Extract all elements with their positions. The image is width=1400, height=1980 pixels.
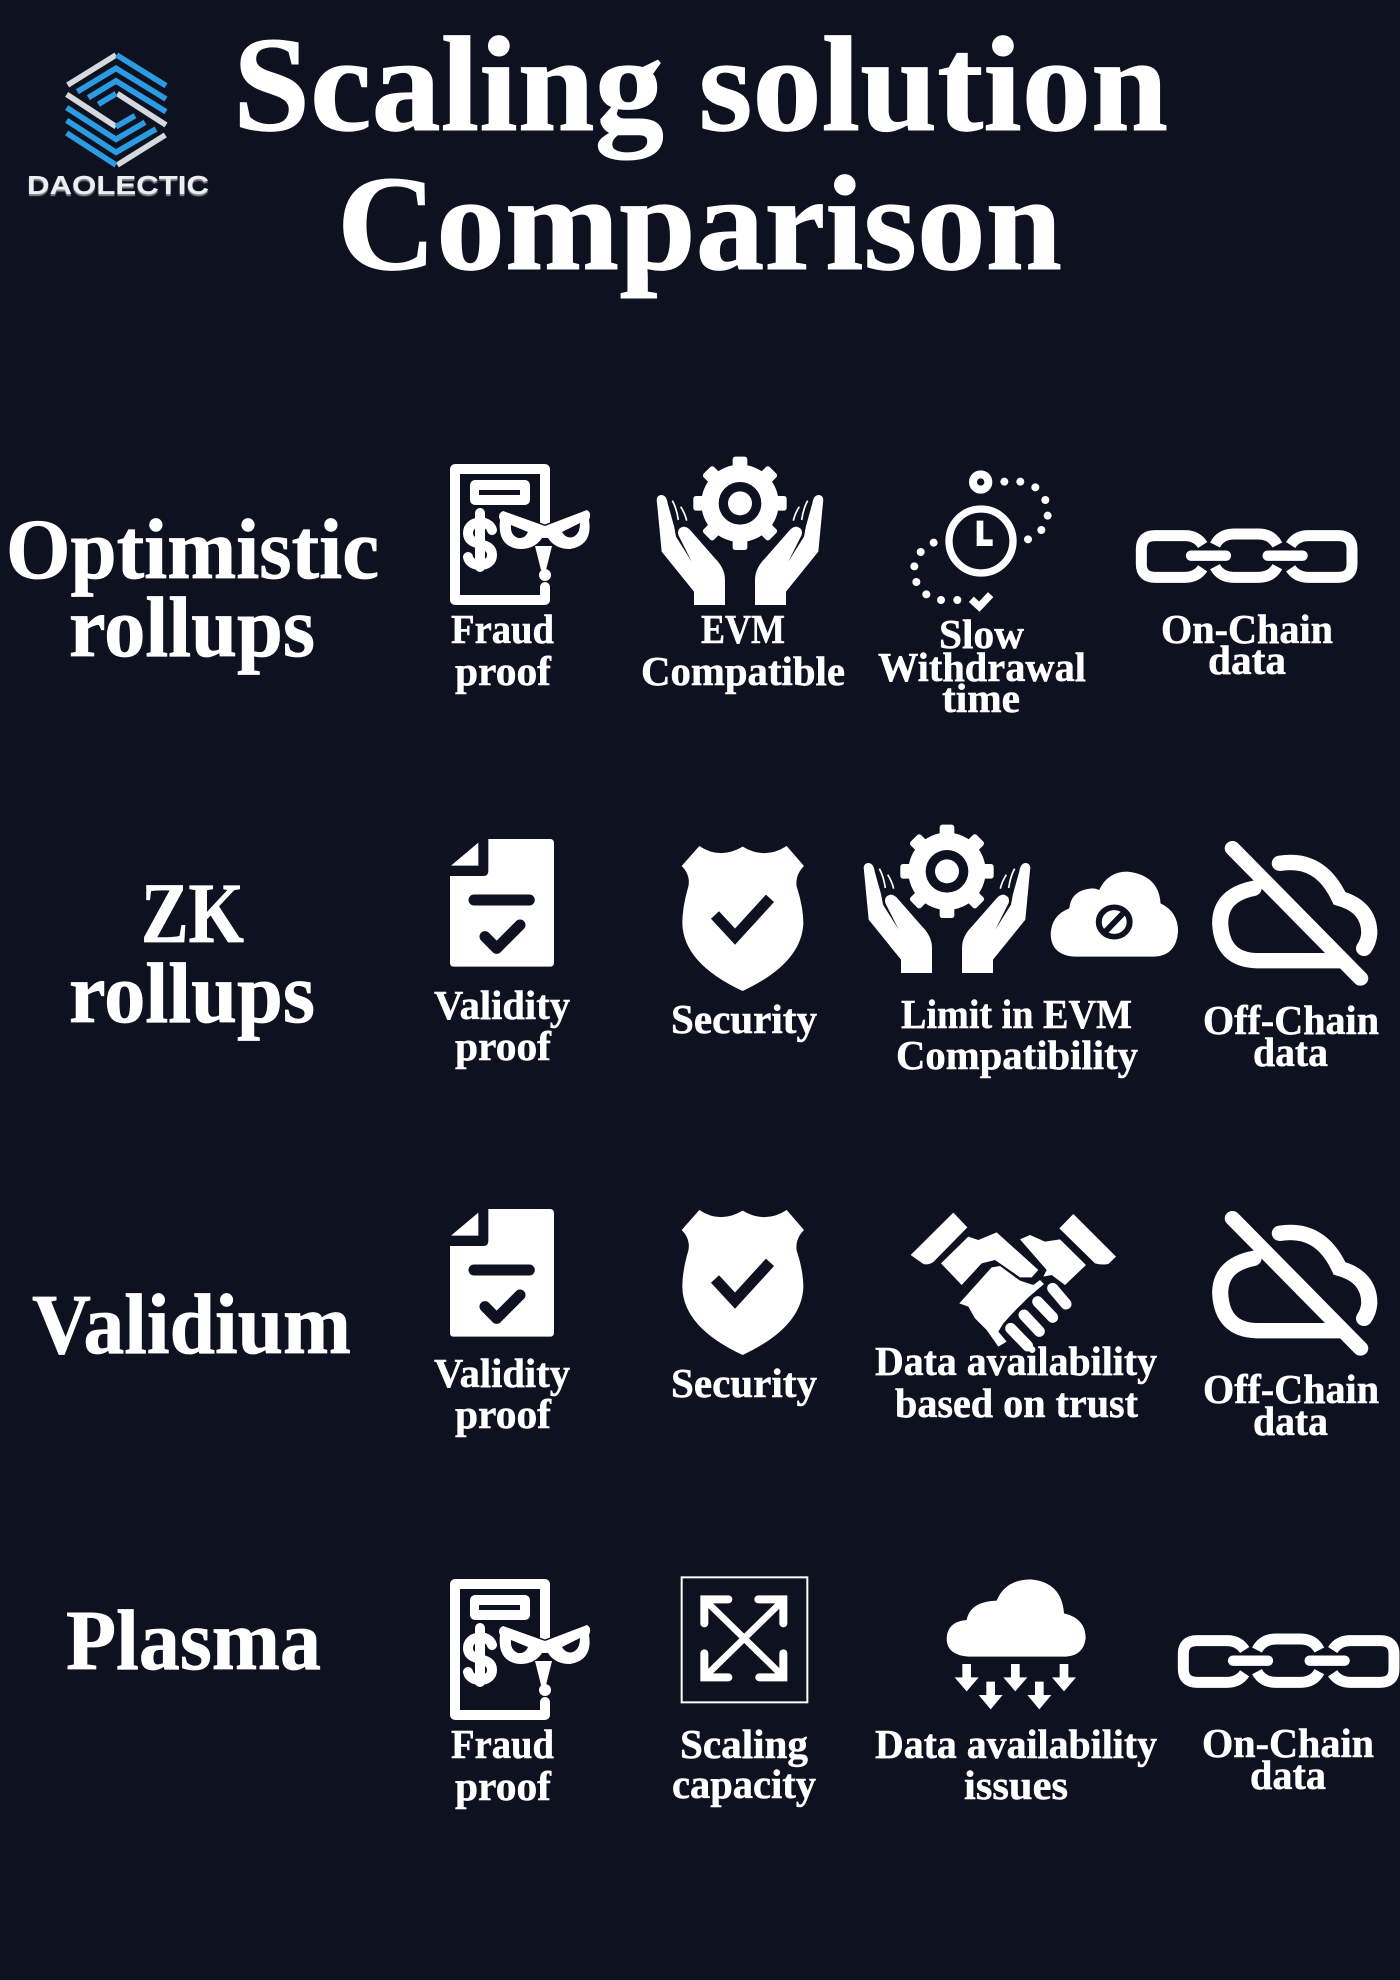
label: Validity proof: proof (455, 1023, 552, 1069)
label: Fraud proof: Fraud (451, 1721, 554, 1767)
label: Data availability based on trust: based on trust (895, 1380, 1138, 1426)
label: Scaling capacity: capacity (672, 1761, 816, 1807)
label: Security: Security (671, 996, 817, 1042)
label: Fraud proof (451, 1721, 554, 1809)
row heading: ZK rollups (69, 865, 315, 1041)
label: EVM Compatible: Compatible (641, 648, 845, 694)
icon: security shield (682, 1210, 804, 1355)
label: On-Chain data (1202, 1720, 1374, 1798)
row heading: Optimistic rollups: rollups (69, 579, 315, 675)
label: Data availability issues (875, 1721, 1157, 1808)
title: Scaling solution (233, 10, 1168, 160)
icon: cloud with download arrows (947, 1579, 1086, 1709)
label: Validity proof (434, 1350, 570, 1437)
label: Data availability issues: issues (964, 1762, 1068, 1808)
label: On-Chain data: data (1250, 1752, 1326, 1798)
label: Fraud proof: Fraud (451, 606, 554, 652)
icon: hands with gear and blocked cloud (864, 825, 1178, 973)
label: On-Chain data: On-Chain (1202, 1720, 1374, 1766)
label: Off-Chain data: Off-Chain (1203, 1366, 1379, 1412)
icon: crossed-out cloud (1220, 1218, 1369, 1348)
icon: hands holding gear (657, 457, 823, 605)
label: EVM Compatible: EVM (701, 606, 785, 652)
icon: fraud proof document with mask (455, 1584, 590, 1715)
label: Data availability based on trust: Data availability (875, 1338, 1157, 1384)
icon: crossed-out cloud (1220, 848, 1369, 978)
row heading: Optimistic rollups (6, 501, 379, 675)
icon: security shield (682, 846, 804, 991)
icon: clock with dotted path (910, 474, 1052, 607)
label: Fraud proof: proof (455, 1763, 552, 1809)
label: Off-Chain data: data (1253, 1029, 1328, 1075)
label: Fraud proof (451, 606, 554, 694)
label: Slow Withdrawal time: time (942, 675, 1020, 721)
row heading: Optimistic rollups: Optimistic (6, 501, 379, 597)
label: Limit in EVM Compatibility: Compatibility (896, 1032, 1138, 1078)
label: EVM Compatible (641, 606, 845, 694)
label: Limit in EVM Compatibility (896, 991, 1138, 1078)
label: Slow Withdrawal time: Slow (939, 611, 1024, 657)
title: Comparison (337, 149, 1062, 299)
label: Scaling capacity (672, 1721, 816, 1807)
label: Validity proof (434, 982, 570, 1069)
label: Validity proof: Validity (434, 1350, 570, 1396)
label: Validity proof: proof (455, 1391, 552, 1437)
label: Off-Chain data: data (1253, 1398, 1328, 1444)
icon: chain links (1183, 1639, 1394, 1682)
label: Data availability issues: Data availability (875, 1721, 1157, 1767)
icon: scaling arrows in a box (682, 1577, 807, 1702)
label: Fraud proof: proof (455, 648, 552, 694)
icon: chain links (1141, 534, 1352, 577)
label: On-Chain data (1161, 606, 1333, 683)
row: ZK rollups (69, 825, 1379, 1078)
label: Security: Security (671, 1360, 817, 1406)
logo: Daolectic: DAOLECTIC (27, 170, 209, 200)
row heading: Plasma: Plasma (66, 1592, 321, 1688)
label: Off-Chain data (1203, 997, 1379, 1075)
label: On-Chain data: data (1208, 637, 1286, 683)
icon: validity document with check (450, 1209, 554, 1337)
row: Optimistic rollups (6, 457, 1352, 721)
label: Off-Chain data (1203, 1366, 1379, 1444)
label: Limit in EVM Compatibility: Limit in EVM (901, 991, 1132, 1037)
row heading: ZK rollups: ZK (141, 865, 244, 961)
icon: handshake (911, 1213, 1116, 1347)
logo: Daolectic (27, 55, 209, 200)
row heading: ZK rollups: rollups (69, 945, 315, 1041)
row: Validium (32, 1209, 1379, 1444)
row heading: Validium: Validium (32, 1276, 351, 1372)
label: Off-Chain data: Off-Chain (1203, 997, 1379, 1043)
label: On-Chain data: On-Chain (1161, 606, 1333, 652)
label: Validity proof: Validity (434, 982, 570, 1028)
label: Slow Withdrawal time: Withdrawal (878, 644, 1086, 690)
label: Scaling capacity: Scaling (680, 1721, 808, 1767)
icon: fraud proof document with mask (455, 469, 590, 600)
title (233, 10, 1168, 299)
icon: validity document with check (450, 839, 554, 967)
label: Slow Withdrawal time (878, 611, 1086, 721)
label: Data availability based on trust (875, 1338, 1157, 1426)
row: Plasma (66, 1577, 1394, 1809)
